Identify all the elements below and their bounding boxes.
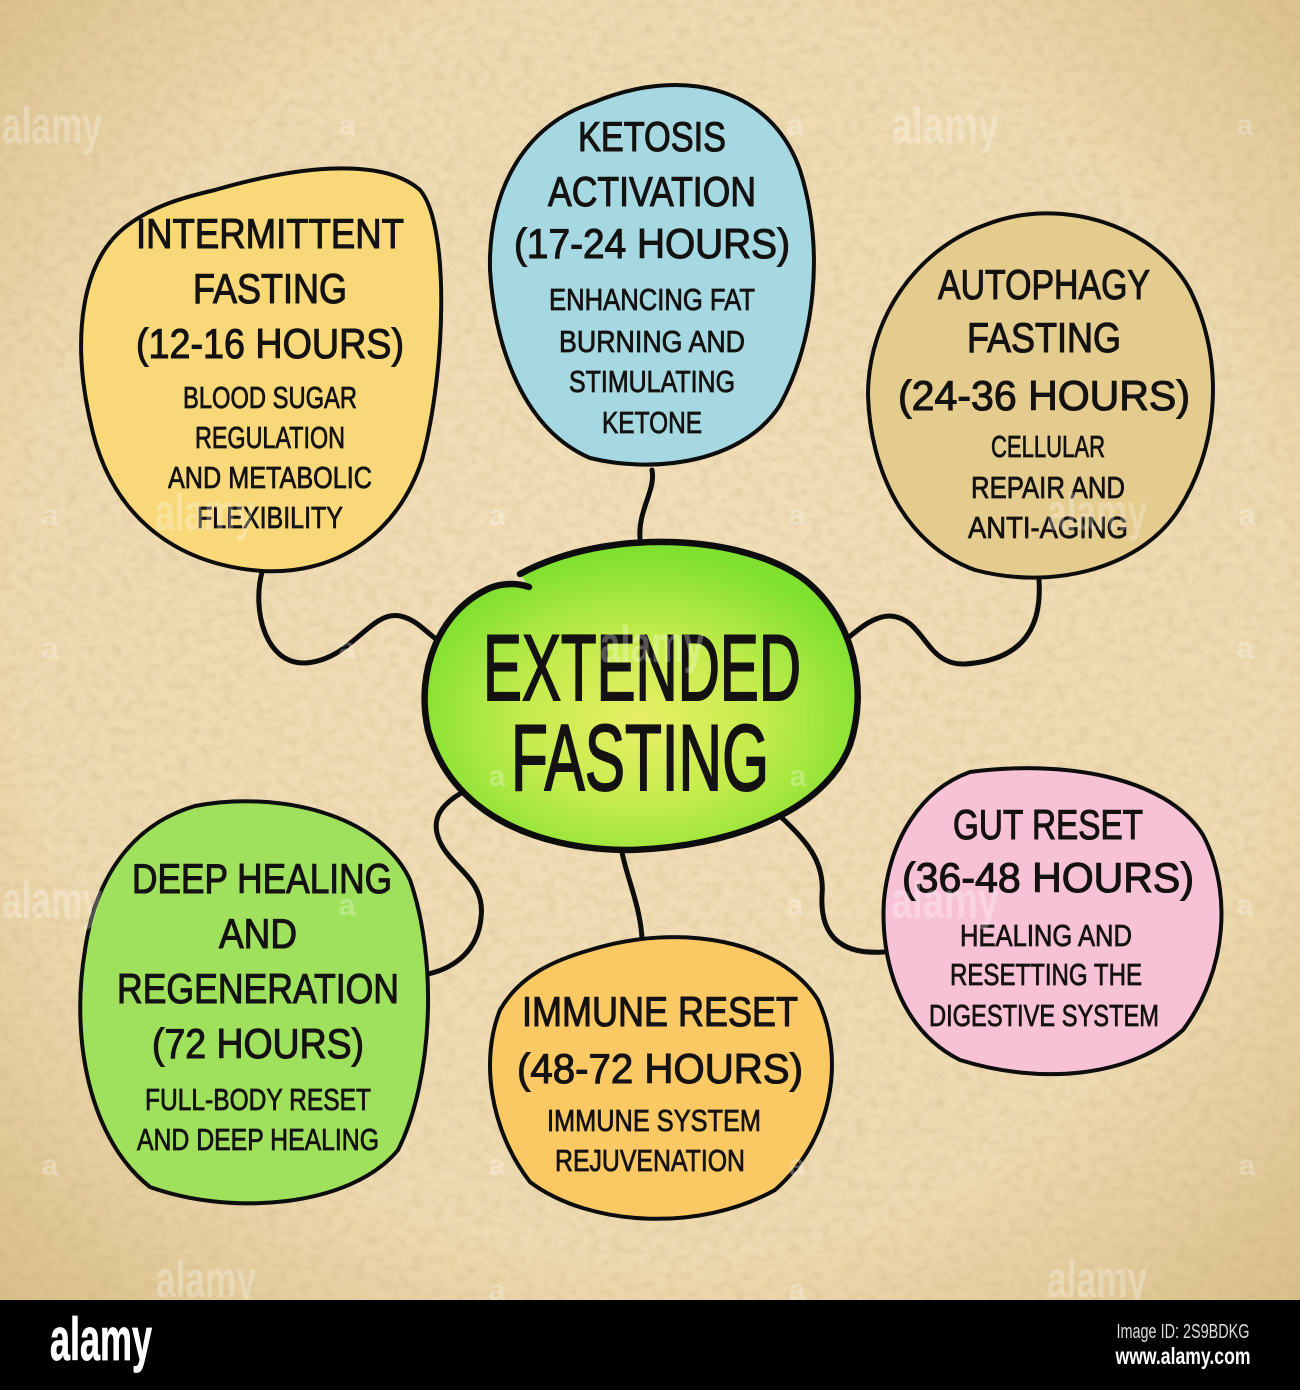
- watermarks: a: [42, 1149, 59, 1182]
- watermarks: alamy: [1047, 484, 1147, 542]
- node: gut reset: (36-48 HOURS): [902, 854, 1194, 901]
- node: autophagy fasting: ANTI-AGING: [968, 510, 1128, 545]
- watermarks: alamy: [1047, 1251, 1147, 1309]
- footer logo: alamy: [50, 1306, 152, 1373]
- node: deep healing and regeneration: FULL-BODY RESET: [145, 1082, 371, 1117]
- node: autophagy fasting: [868, 213, 1213, 578]
- node: autophagy fasting: CELLULAR: [991, 429, 1105, 464]
- watermarks: alamy: [2, 872, 102, 930]
- watermarks: a: [789, 499, 806, 532]
- watermarks: a: [1237, 109, 1254, 142]
- node: central extended fasting: FASTING: [511, 705, 769, 810]
- node: intermittent fasting: FLEXIBILITY: [197, 500, 343, 535]
- node: deep healing and regeneration: AND DEEP HEALING: [137, 1122, 379, 1157]
- watermarks: a: [1237, 632, 1254, 665]
- node: intermittent fasting: REGULATION: [195, 420, 345, 455]
- watermarks: a: [489, 499, 506, 532]
- node: ketosis activation: KETOSIS: [578, 113, 726, 160]
- node: ketosis activation: BURNING AND: [559, 324, 745, 359]
- watermarks: a: [1239, 1149, 1256, 1182]
- site address: www.alamy.com: [1115, 1343, 1250, 1369]
- watermarks: a: [339, 109, 356, 142]
- node: ketosis activation: (17-24 HOURS): [514, 220, 790, 267]
- node: immune reset: IMMUNE RESET: [522, 988, 798, 1035]
- node: central extended fasting: [425, 542, 858, 850]
- node: immune reset: [490, 937, 832, 1219]
- watermarks: a: [1237, 889, 1254, 922]
- node: autophagy fasting: REPAIR AND: [971, 470, 1125, 505]
- node: gut reset: HEALING AND: [960, 918, 1132, 953]
- node: autophagy fasting: (24-36 HOURS): [898, 372, 1190, 419]
- node: deep healing and regeneration: (72 HOURS): [152, 1020, 364, 1067]
- watermarks: alamy: [891, 872, 999, 930]
- node: gut reset: DIGESTIVE SYSTEM: [929, 998, 1159, 1033]
- node: deep healing and regeneration: AND: [219, 910, 297, 957]
- node: deep healing and regeneration: REGENERATION: [117, 965, 399, 1012]
- watermarks: a: [789, 1149, 806, 1182]
- watermarks: alamy: [156, 1251, 256, 1309]
- node: intermittent fasting: FASTING: [193, 265, 347, 312]
- node: ketosis activation: ENHANCING FAT: [549, 282, 755, 317]
- watermarks: a: [339, 889, 356, 922]
- node: ketosis activation: [490, 85, 814, 465]
- watermarks: a: [42, 499, 59, 532]
- watermarks: a: [789, 1274, 806, 1307]
- watermarks: a: [489, 760, 506, 793]
- watermarks: alamy: [600, 616, 704, 674]
- node: central extended fasting: EXTENDED: [483, 615, 801, 720]
- watermarks: a: [787, 109, 804, 142]
- footer bar: [0, 1300, 1300, 1390]
- node: gut reset: GUT RESET: [953, 801, 1143, 848]
- node: immune reset: (48-72 HOURS): [517, 1045, 803, 1092]
- watermarks: a: [339, 632, 356, 665]
- watermarks: alamy: [2, 97, 102, 155]
- node: gut reset: [884, 768, 1221, 1074]
- watermarks: a: [790, 760, 807, 793]
- node: autophagy fasting: FASTING: [967, 314, 1121, 361]
- image id: Image ID: 2S9BDKG: [1116, 1321, 1250, 1343]
- connector lines: [259, 470, 1039, 974]
- node: intermittent fasting: BLOOD SUGAR: [183, 380, 357, 415]
- node: ketosis activation: ACTIVATION: [548, 168, 756, 215]
- watermarks: alamy: [155, 484, 255, 542]
- node: immune reset: REJUVENATION: [555, 1143, 745, 1178]
- node: immune reset: IMMUNE SYSTEM: [547, 1103, 761, 1138]
- watermarks: a: [787, 889, 804, 922]
- node: ketosis activation: STIMULATING: [569, 364, 735, 399]
- node: intermittent fasting: AND METABOLIC: [168, 460, 372, 495]
- watermarks: a: [1239, 499, 1256, 532]
- node: deep healing and regeneration: [80, 801, 428, 1203]
- node: deep healing and regeneration: DEEP HEALING: [132, 855, 392, 902]
- node: intermittent fasting: (12-16 HOURS): [136, 320, 404, 367]
- node: autophagy fasting: AUTOPHAGY: [938, 261, 1150, 308]
- node: ketosis activation: KETONE: [602, 405, 702, 440]
- watermarks: a: [489, 1274, 506, 1307]
- watermarks: alamy: [891, 97, 999, 155]
- node: intermittent fasting: [81, 168, 441, 571]
- node: gut reset: RESETTING THE: [950, 957, 1142, 992]
- node: intermittent fasting: INTERMITTENT: [136, 210, 404, 257]
- watermarks: a: [42, 632, 59, 665]
- watermarks: a: [489, 1149, 506, 1182]
